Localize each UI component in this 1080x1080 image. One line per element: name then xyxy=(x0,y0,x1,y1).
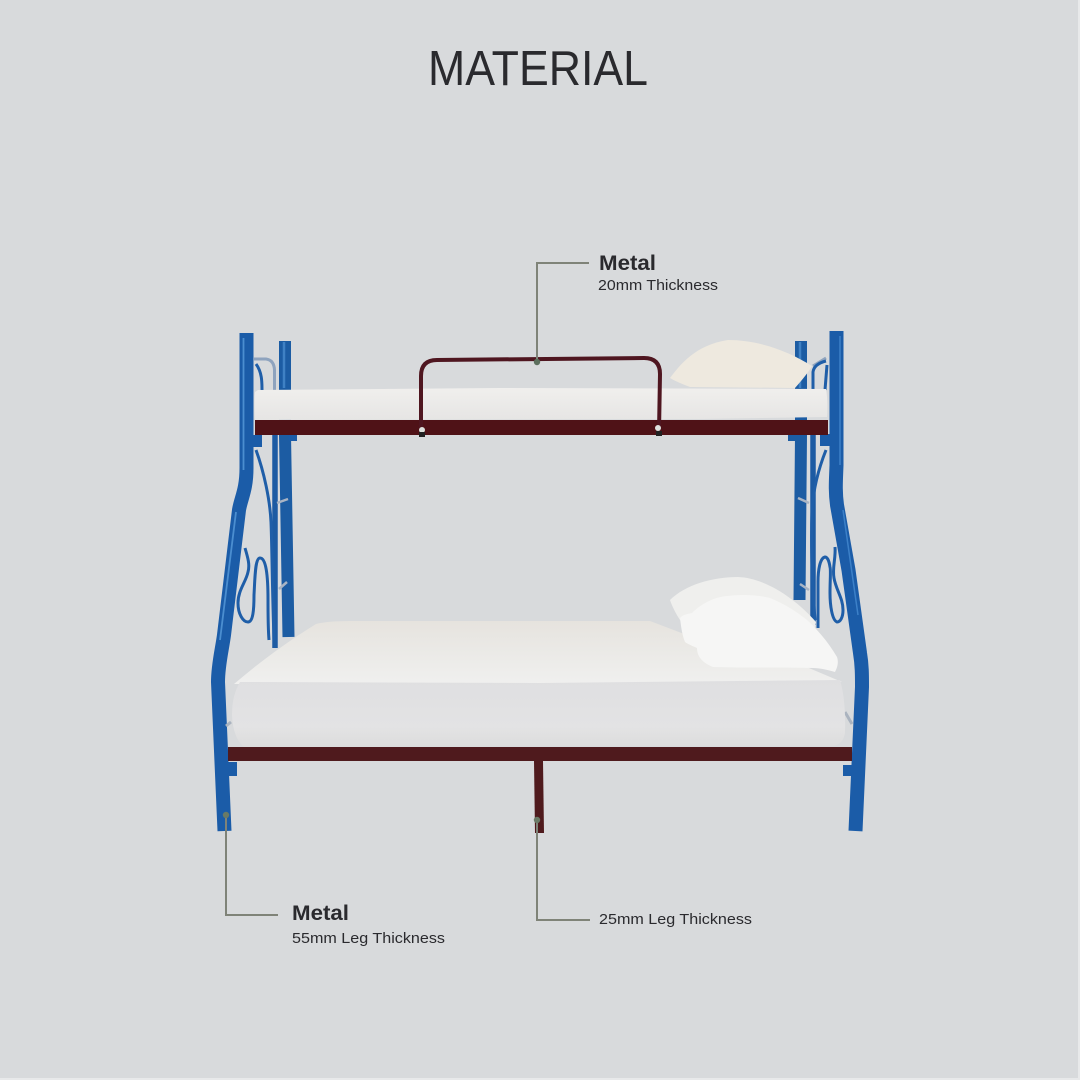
title: MATERIAL xyxy=(428,42,648,96)
bunk bed xyxy=(218,331,862,833)
callout: metal 20mm thickness xyxy=(534,252,718,365)
right scroll work xyxy=(812,358,843,628)
callout: metal 55mm leg thickness xyxy=(223,812,445,947)
left outer post xyxy=(218,333,297,831)
guard rail xyxy=(419,358,662,437)
upper pillow xyxy=(670,340,812,388)
right inner post xyxy=(788,341,813,625)
center leg xyxy=(534,761,544,833)
callout: metal 55mm leg thickness: 55mm Leg Thickness xyxy=(292,930,445,947)
lower bed frame xyxy=(228,747,852,761)
callout: metal 20mm thickness: 20mm Thickness xyxy=(598,277,718,294)
callout: 25mm leg thickness: 25mm Leg Thickness xyxy=(599,911,752,928)
left scroll work xyxy=(238,359,274,640)
lower front pillow xyxy=(680,595,838,672)
lower back pillow xyxy=(670,577,816,642)
right outer post xyxy=(820,331,862,831)
callout: 25mm leg thickness xyxy=(534,817,752,928)
lower mattress xyxy=(232,621,845,747)
left inner post xyxy=(275,341,288,648)
callout: metal 55mm leg thickness: Metal xyxy=(292,902,349,925)
upper bed frame xyxy=(255,420,828,435)
callout: metal 20mm thickness: Metal xyxy=(599,252,656,275)
upper mattress xyxy=(254,388,827,420)
